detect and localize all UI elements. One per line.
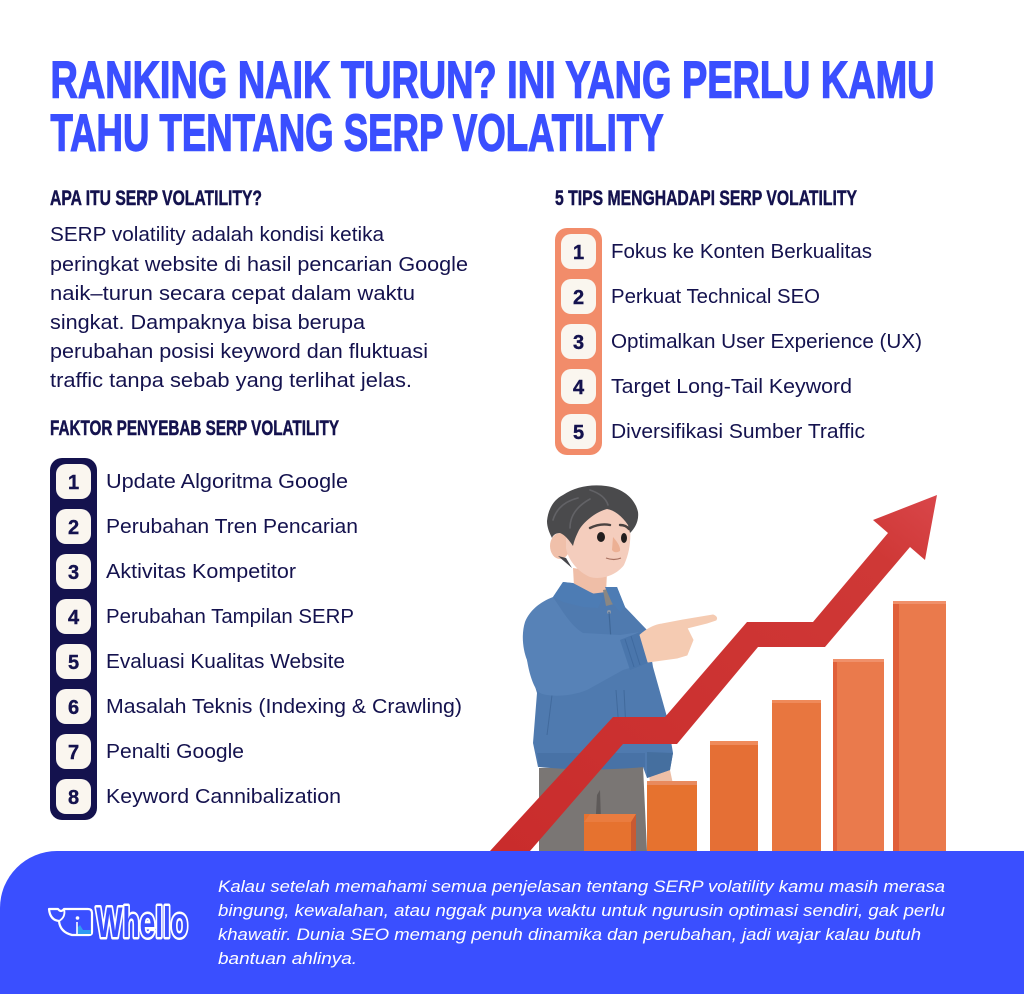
panel: faktor list: 2 <box>68 517 79 539</box>
hand: lower <box>649 770 673 784</box>
panel: faktor list: 3 <box>68 562 79 584</box>
panel: tips list: Optimalkan User Experience (UX) <box>611 331 922 353</box>
text block: definition: singkat. Dampaknya bisa berupa <box>50 312 366 334</box>
footer text: khawatir. Dunia SEO memang penuh dinamika dan perubahan, jadi wajar kalau butuh <box>218 926 921 944</box>
panel: tips list: 4 <box>573 377 585 399</box>
text block: definition: SERP volatility adalah kondisi ketika <box>50 224 385 246</box>
hair <box>547 485 638 546</box>
panel: faktor list: Evaluasi Kualitas Website <box>106 651 345 673</box>
panel: faktor list: 5 <box>68 652 79 674</box>
sweater hem <box>537 753 645 770</box>
text block: definition: traffic tanpa sebab yang terlihat jelas. <box>50 370 412 392</box>
panel: faktor list: Perubahan Tren Pencarian <box>106 516 358 538</box>
panel: faktor list: Perubahan Tampilan SERP <box>106 606 354 628</box>
illustration: person pointing <box>523 485 717 851</box>
text block: definition: naik–turun secara cepat dalam waktu <box>50 283 415 305</box>
sweater body <box>527 582 673 778</box>
footer text: bantuan ahlinya. <box>218 950 357 968</box>
arrow <box>490 495 937 851</box>
footer panel <box>0 851 1024 994</box>
footer text: Kalau setelah memahami semua penjelasan tentang SERP volatility kamu masih merasa <box>218 878 945 896</box>
inner shirt and zipper <box>603 588 614 606</box>
panel: faktor list: Penalti Google <box>106 741 244 763</box>
footer text: bingung, kewalahan, atau nggak punya waktu untuk ngurusin optimasi sendiri, gak perlu <box>218 902 945 920</box>
face details <box>590 524 629 529</box>
ear <box>550 533 570 559</box>
panel: tips list: Perkuat Technical SEO <box>611 286 820 308</box>
panel: faktor list: 7 <box>68 742 79 764</box>
bar chart <box>584 601 946 851</box>
panel: faktor list <box>50 458 462 820</box>
heading: apa itu serp volatility: APA ITU SERP VOLATILITY? <box>50 186 262 210</box>
panel: tips list: Fokus ke Konten Berkualitas <box>611 241 872 263</box>
panel: faktor list: 4 <box>68 607 80 629</box>
panel: tips list: 2 <box>573 287 584 309</box>
heading: 5 tips: 5 TIPS MENGHADAPI SERP VOLATILITY <box>555 186 857 210</box>
footer text <box>218 878 945 968</box>
panel: tips list: 3 <box>573 332 584 354</box>
head <box>566 495 630 578</box>
title <box>50 52 934 162</box>
panel: faktor list: 1 <box>68 472 79 494</box>
panel: faktor list: 8 <box>68 787 79 809</box>
panel: tips list: Diversifikasi Sumber Traffic <box>611 421 865 443</box>
text block: definition: perubahan posisi keyword dan fluktuasi <box>50 341 428 363</box>
panel: tips list <box>555 228 922 455</box>
hand <box>640 615 717 662</box>
panel: faktor list: Keyword Cannibalization <box>106 786 341 808</box>
panel: faktor list: Aktivitas Kompetitor <box>106 561 296 583</box>
panel: faktor list: Update Algoritma Google <box>106 471 348 493</box>
text block: definition <box>50 224 468 392</box>
pointing sleeve <box>523 597 650 696</box>
heading: faktor penyebab: FAKTOR PENYEBAB SERP VOLATILITY <box>50 416 339 440</box>
panel: tips list: 5 <box>573 422 584 444</box>
neck <box>573 568 607 594</box>
panel: tips list: Target Long-Tail Keyword <box>611 376 852 398</box>
logo: Whello <box>49 899 188 947</box>
pants <box>539 766 647 851</box>
collar <box>553 582 603 608</box>
cuff <box>620 632 650 670</box>
panel: tips list: 1 <box>573 242 584 264</box>
logo: Whello: Whello <box>96 899 188 947</box>
title: TAHU TENTANG SERP VOLATILITY <box>50 104 664 162</box>
panel: faktor list: 6 <box>68 697 79 719</box>
panel: faktor list: Masalah Teknis (Indexing & Crawling) <box>106 696 462 718</box>
icon: whale <box>49 909 92 935</box>
text block: definition: peringkat website di hasil pencarian Google <box>50 254 468 276</box>
